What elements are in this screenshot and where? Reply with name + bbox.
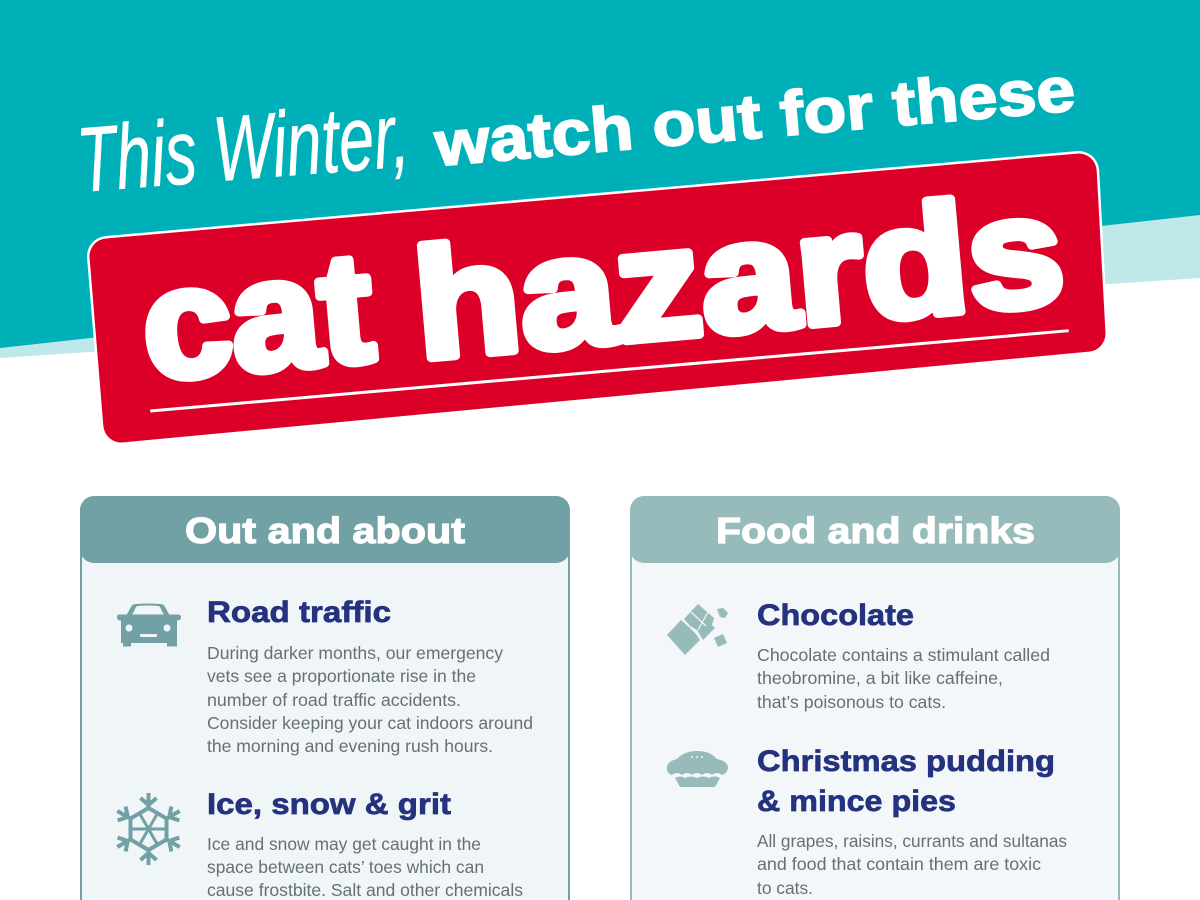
- panel header: [80, 496, 570, 563]
- text block: christmas pudding and mince pies: to cats.: [757, 878, 813, 898]
- text block: christmas pudding and mince pies: All grapes, raisins, currants and sultanas: [757, 831, 1067, 851]
- icon: car: [117, 604, 181, 646]
- panel heading: Out and about: [185, 510, 465, 551]
- text block: christmas pudding and mince pies: and food that contain them are toxic: [757, 854, 1041, 874]
- text block: chocolate: [757, 599, 1050, 712]
- banner text: [135, 160, 1070, 417]
- heading: chocolate: Chocolate: [757, 599, 914, 632]
- title line: This Winter: This Winter,: [74, 84, 413, 212]
- text block: chocolate: that’s poisonous to cats.: [757, 692, 946, 712]
- heading: christmas pudding and mince pies: Christmas pudding: [757, 745, 1055, 778]
- text block: ice, snow and grit: cause frostbite. Salt and other chemicals: [207, 880, 523, 900]
- title line: watch out for these: watch out for these: [431, 54, 1078, 180]
- text block: road traffic: vets see a proportionate rise in the: [207, 666, 476, 686]
- panel header: [630, 496, 1120, 563]
- icon: pie: [667, 751, 728, 787]
- text block: road traffic: [207, 596, 533, 756]
- text block: ice, snow and grit: [207, 788, 523, 900]
- panel body: [631, 520, 1119, 900]
- text block: chocolate: Chocolate contains a stimulant called: [757, 645, 1050, 665]
- panel: food and drinks: [630, 496, 1120, 900]
- text block: chocolate: theobromine, a bit like caffeine,: [757, 668, 1003, 688]
- text block: ice, snow and grit: space between cats’ toes which can: [207, 857, 484, 877]
- icon: snowflake: [113, 793, 184, 865]
- background band: light teal: [0, 200, 1200, 358]
- text block: road traffic: number of road traffic accidents.: [207, 690, 461, 710]
- heading: ice, snow and grit: Ice, snow & grit: [207, 788, 451, 821]
- banner text: cat: [135, 220, 380, 414]
- text block: road traffic: During darker months, our emergency: [207, 643, 503, 663]
- banner text: hazards: [408, 163, 1070, 393]
- panel: out and about: [80, 496, 570, 900]
- text block: road traffic: Consider keeping your cat indoors around: [207, 713, 533, 733]
- banner background: [108, 172, 1088, 424]
- text block: ice, snow and grit: Ice and snow may get caught in the: [207, 834, 481, 854]
- icon: chocolate: [667, 604, 728, 655]
- heading: christmas pudding and mince pies: [757, 745, 1055, 818]
- text block: road traffic: the morning and evening rush hours.: [207, 736, 493, 756]
- heading: christmas pudding and mince pies: & mince pies: [757, 785, 956, 818]
- background band: teal header: [0, 0, 1200, 348]
- text block: christmas pudding and mince pies: [757, 745, 1067, 898]
- panel heading: Food and drinks: [716, 510, 1035, 551]
- panel body: [81, 520, 569, 900]
- banner underline: [150, 329, 1069, 413]
- heading: road traffic: Road traffic: [207, 596, 391, 629]
- title banner: cat hazards: [108, 160, 1088, 425]
